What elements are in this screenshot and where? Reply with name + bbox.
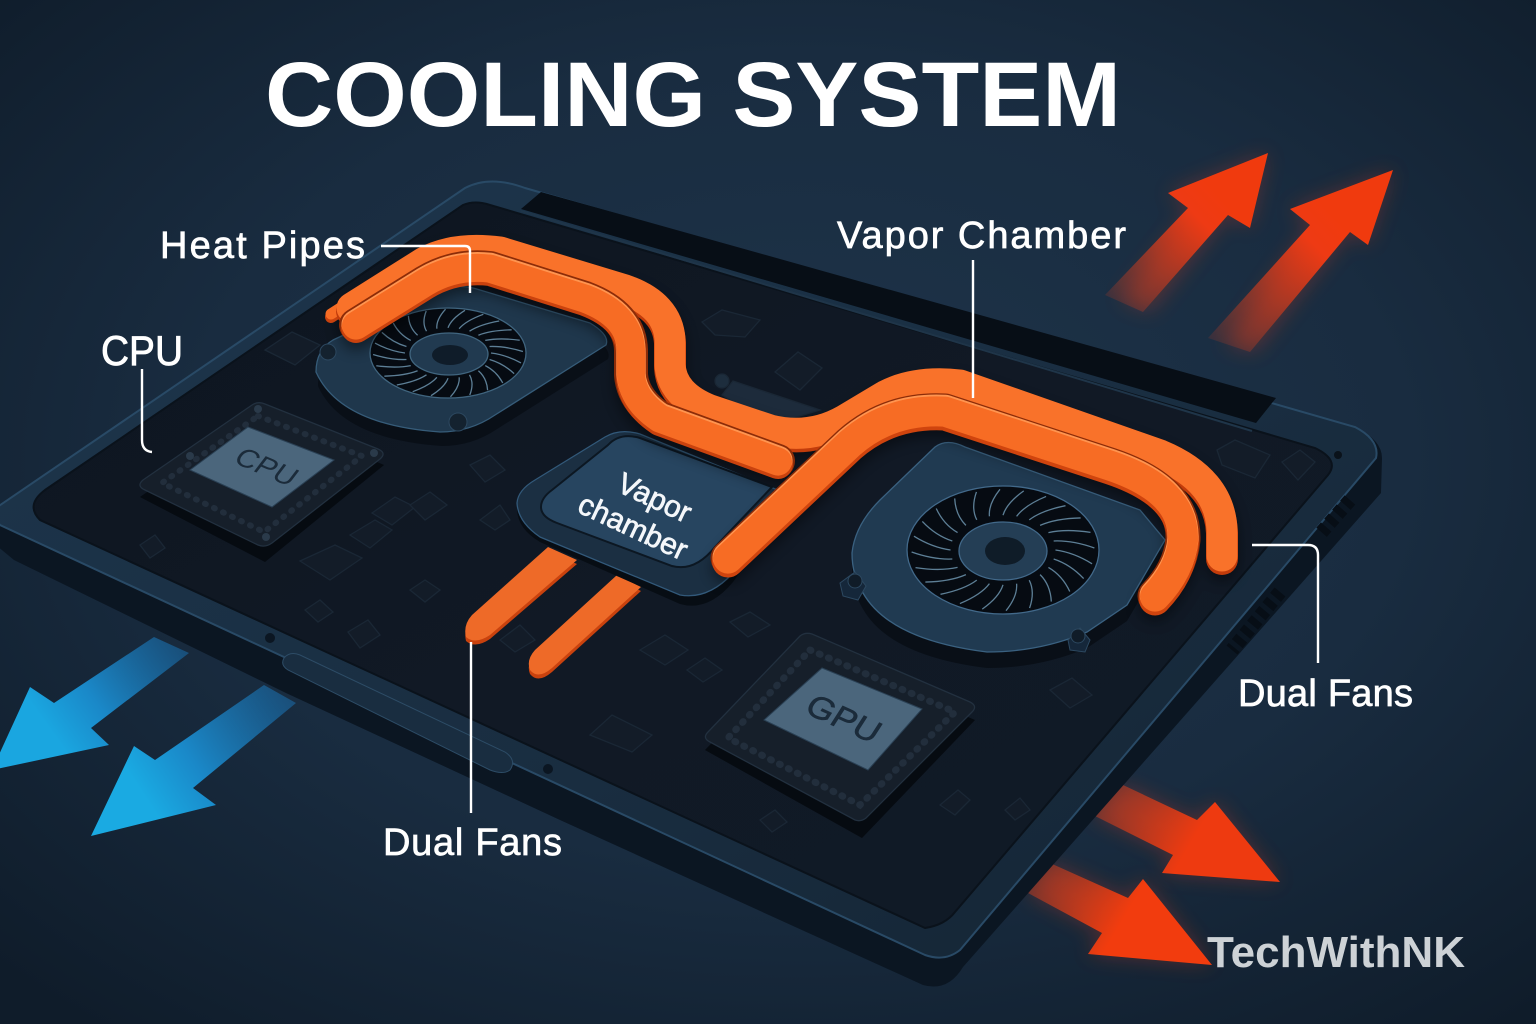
stub two	[529, 579, 641, 679]
label: dual fans right: Dual Fans	[1238, 673, 1413, 715]
label: dual fans right	[1238, 545, 1413, 715]
stub one	[465, 551, 577, 645]
side vents	[1320, 500, 1350, 534]
watermark: TechWithNK	[1207, 928, 1465, 977]
vapor chamber plate: chamber	[573, 488, 693, 567]
fan: upper left	[316, 286, 609, 446]
heat pipe: rear strand	[352, 250, 1222, 559]
title: COOLING SYSTEM	[265, 44, 1121, 146]
label: cpu	[101, 327, 183, 452]
label: heat pipes: Heat Pipes	[160, 225, 365, 267]
hot air arrows: lower right	[1028, 785, 1280, 965]
hub	[410, 333, 488, 375]
cpu chip	[190, 427, 334, 507]
hinge	[521, 192, 1276, 423]
label: dual fans bottom: Dual Fans	[383, 822, 562, 864]
label: vapor chamber: Vapor Chamber	[837, 215, 1126, 257]
label: heat pipes	[160, 225, 470, 293]
small board components	[140, 310, 1315, 832]
small rear stub	[331, 297, 362, 317]
hub	[959, 522, 1047, 580]
chassis shadow and side wall	[0, 182, 1382, 987]
vapor chamber plate	[517, 432, 790, 606]
front notch	[283, 654, 513, 772]
heat pipe: front left strand	[356, 266, 778, 464]
label: cpu: CPU	[101, 327, 183, 374]
cpu chip label: CPU	[228, 443, 304, 492]
hot air arrows: upper right	[1105, 153, 1393, 352]
gpu chip	[764, 668, 922, 770]
tray	[34, 202, 1332, 928]
heat pipes	[331, 250, 1222, 605]
fan blades	[373, 309, 523, 397]
cpu module	[140, 403, 384, 562]
laptop chassis	[0, 182, 1382, 987]
fan blades	[912, 489, 1094, 611]
gpu chip label: GPU	[799, 688, 888, 750]
heat pipe stubs below plate	[465, 547, 641, 679]
cool air arrows: lower left	[0, 637, 296, 836]
heat pipe: front right strand	[728, 410, 1183, 600]
pipe shadow	[352, 259, 1222, 605]
fan opening	[370, 308, 526, 398]
chassis rim	[0, 182, 1377, 958]
fan: lower right	[840, 442, 1165, 668]
gpu module	[705, 633, 975, 838]
fan opening	[907, 486, 1099, 614]
vapor chamber label: Vapor	[612, 467, 697, 530]
